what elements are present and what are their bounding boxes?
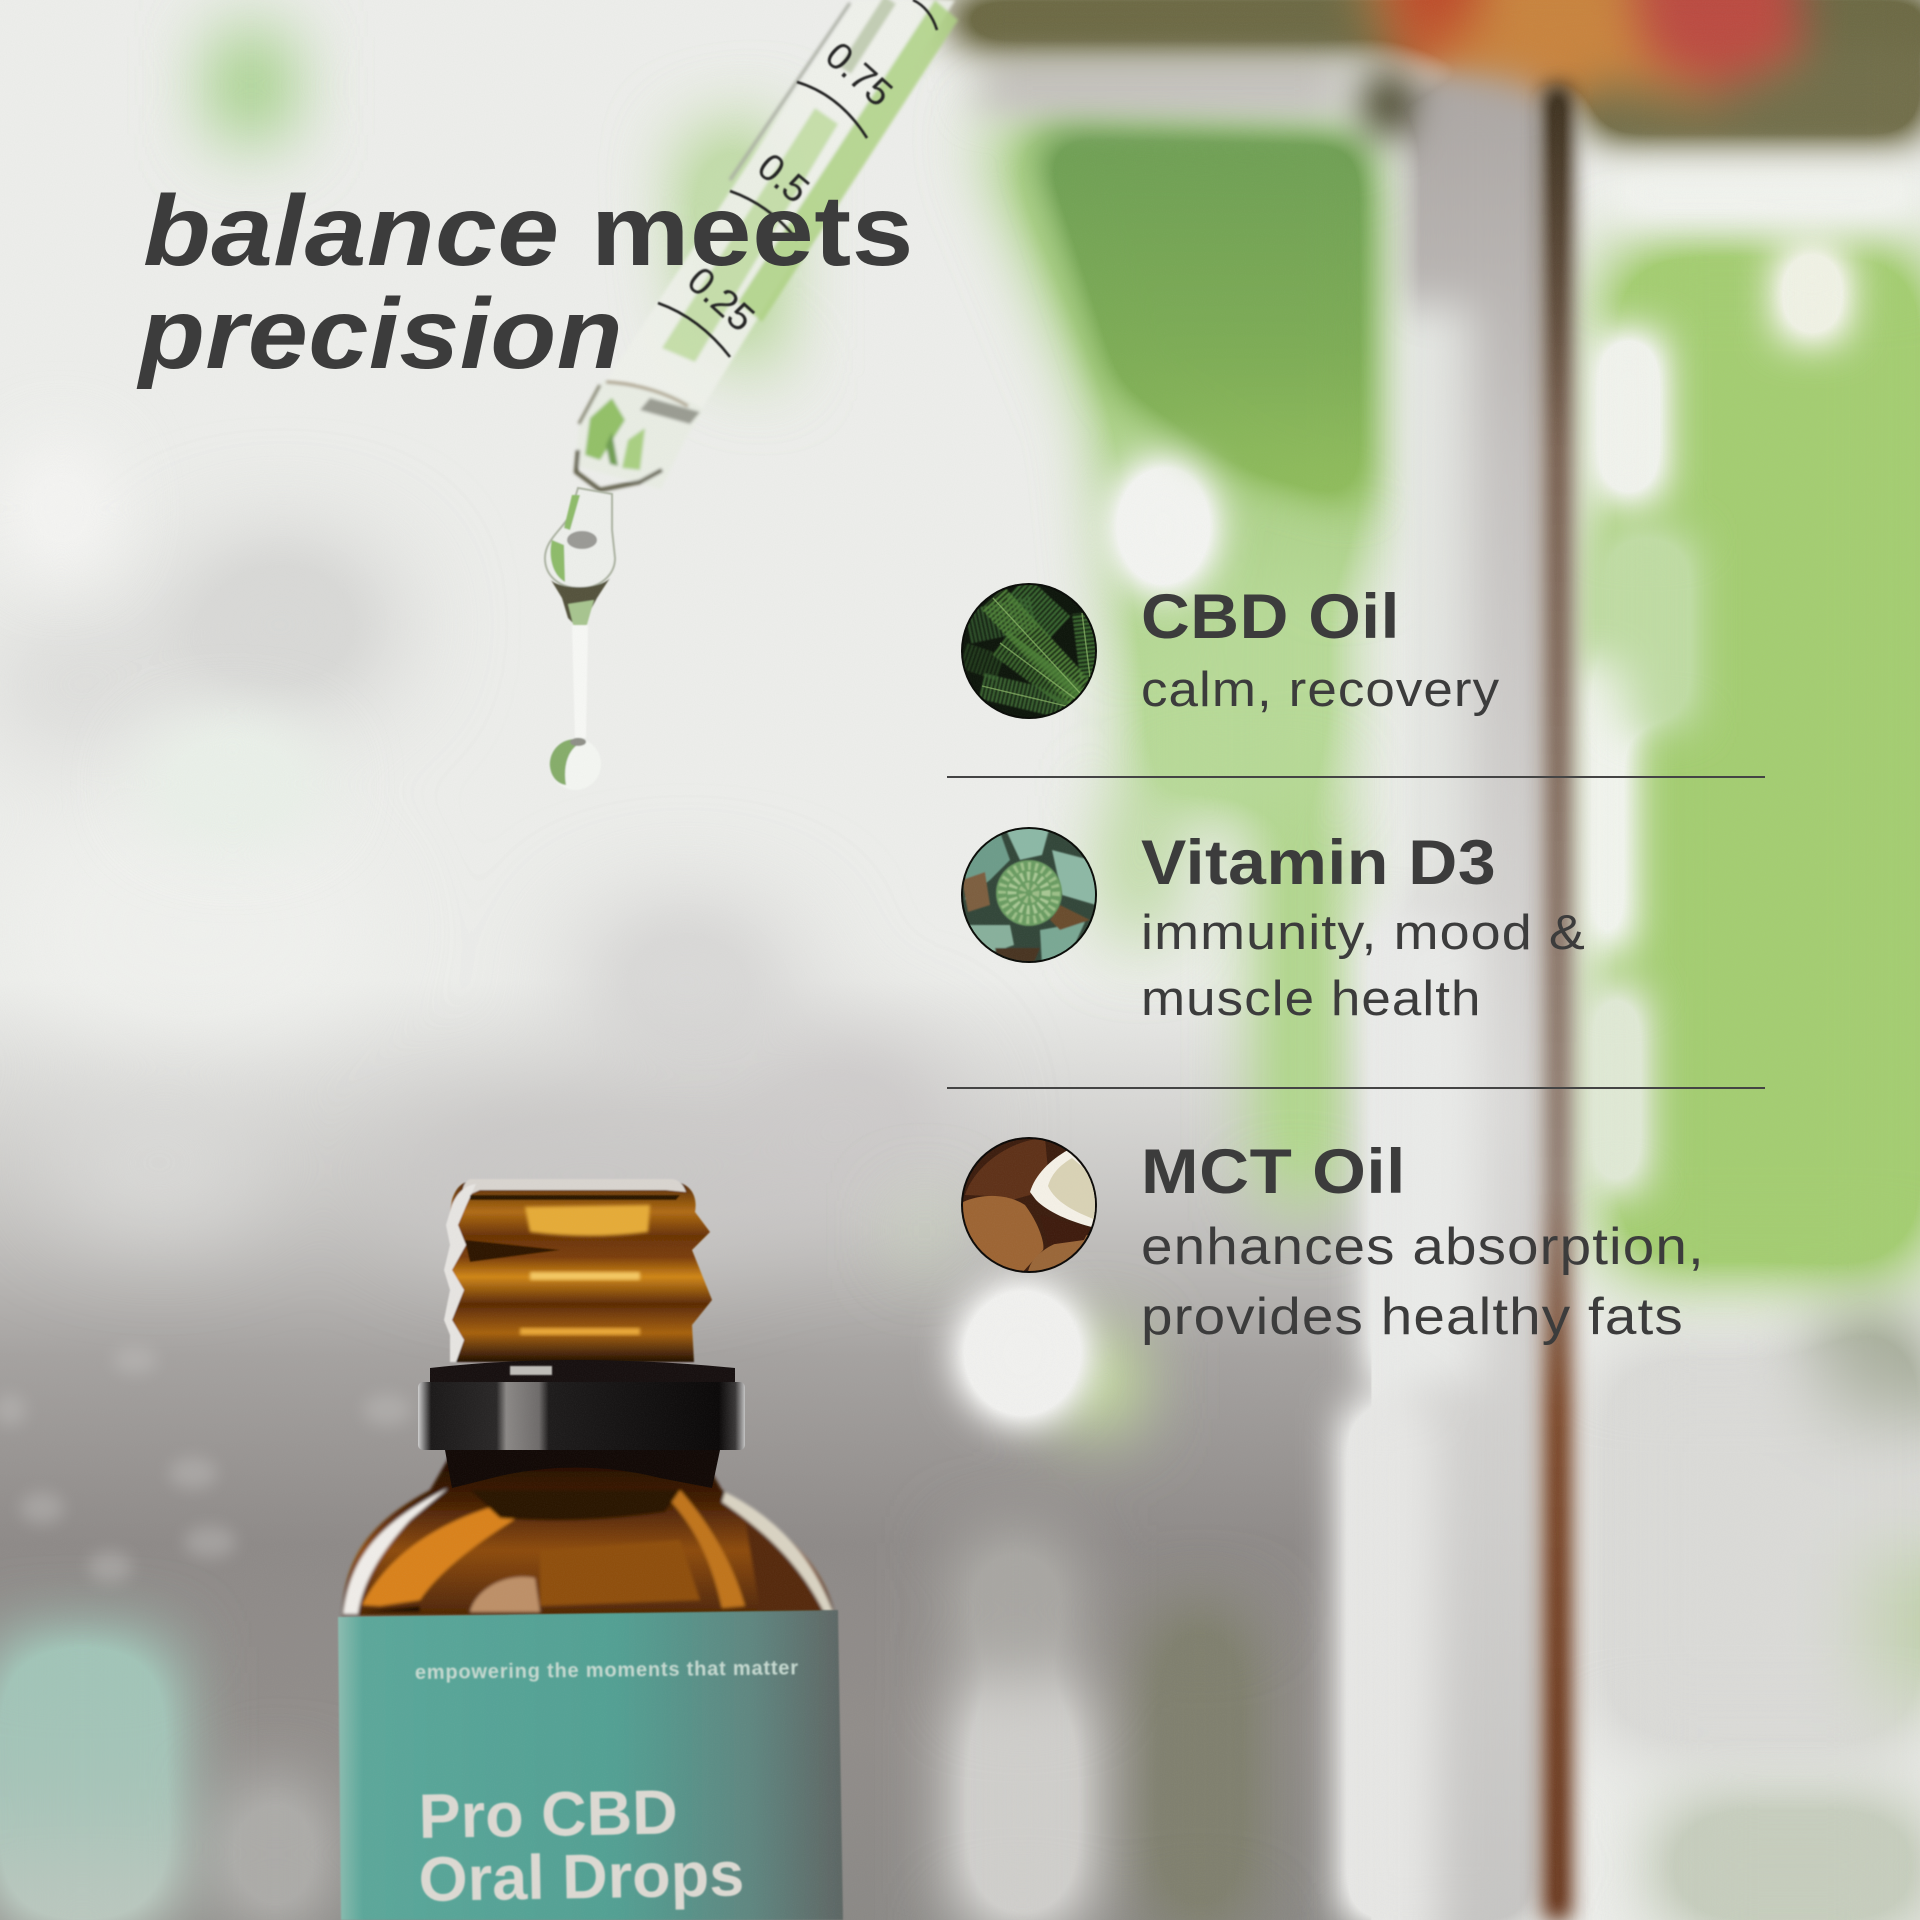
dropper numbers — [679, 34, 900, 340]
dropper tip and hanging bead — [545, 488, 615, 630]
dropper glass shoulder — [576, 380, 704, 490]
icon: coconut — [960, 1137, 1100, 1277]
dropper numbers: 0.5 — [749, 146, 817, 212]
title — [136, 175, 914, 390]
title: balance meets — [143, 175, 914, 287]
description: MCT Oil: provides healthy fats — [1141, 1288, 1684, 1346]
dropper scale marks — [658, 0, 937, 357]
bottle label — [338, 1610, 843, 1920]
title: precision — [139, 278, 623, 390]
description: Vitamin D3 — [1141, 906, 1586, 1026]
heading: MCT Oil: MCT Oil — [1141, 1137, 1406, 1207]
ingredient: CBD Oil — [1141, 582, 1500, 717]
dropper glass tube — [607, 0, 958, 444]
label product name: Oral Drops — [418, 1839, 745, 1915]
bottle body — [342, 1452, 835, 1616]
dropper numbers: 0.75 — [817, 34, 900, 115]
bottle neck — [444, 1179, 712, 1362]
description: MCT Oil: enhances absorption, — [1141, 1218, 1705, 1276]
description: Vitamin D3: muscle health — [1141, 972, 1482, 1026]
label tagline: empowering the moments that matter — [415, 1657, 799, 1684]
icon: hemp leaves — [960, 583, 1100, 723]
lower-left bokeh spots — [0, 1346, 411, 1583]
heading: CBD Oil: CBD Oil — [1141, 582, 1400, 652]
icon: broccoli — [960, 826, 1100, 967]
dropper numbers: 0.25 — [679, 259, 762, 340]
bottle collar — [418, 1360, 745, 1488]
description: MCT Oil — [1141, 1218, 1705, 1346]
bottle — [338, 1179, 843, 1920]
heading: Vitamin D3: Vitamin D3 — [1141, 828, 1496, 898]
ingredient: Vitamin D3 — [1141, 828, 1586, 1026]
label product name — [418, 1777, 745, 1915]
falling drop — [549, 738, 601, 790]
falling oil thread — [572, 625, 588, 738]
description: Vitamin D3: immunity, mood & — [1141, 906, 1586, 960]
dropper — [545, 0, 958, 790]
label product name: Pro CBD — [418, 1777, 678, 1852]
ingredient: MCT Oil — [1141, 1137, 1705, 1346]
description: CBD Oil: calm, recovery — [1141, 663, 1500, 717]
